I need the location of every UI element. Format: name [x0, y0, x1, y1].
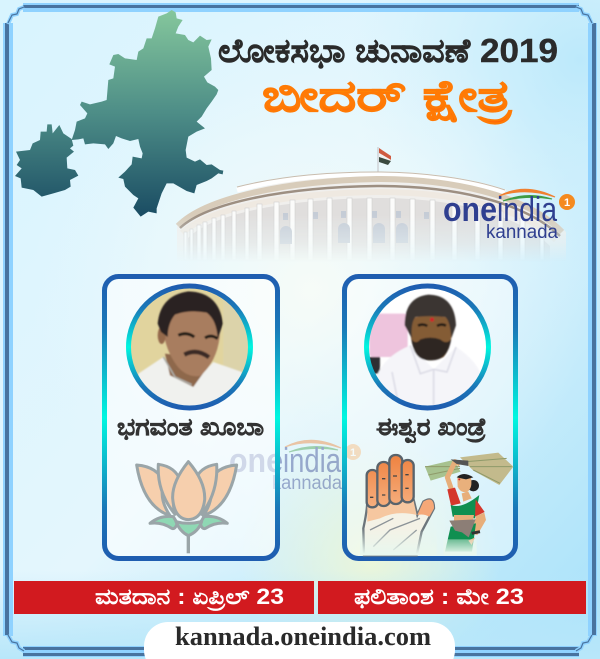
candidate name: ಈಶ್ವರ ಖಂಡ್ರೆ [376, 414, 486, 444]
portrait: Eshwar Khandre [366, 286, 488, 412]
building body [177, 172, 566, 265]
logo: oneindia kannada: india [497, 191, 557, 229]
watermark logo: kannada [272, 473, 342, 494]
title: ಲೋಕಸಭಾ ಚುನಾವಣೆ 2019 [218, 32, 558, 69]
map of constituency [15, 10, 223, 217]
logo: oneindia kannada: kannada [486, 222, 558, 243]
watermark logo: one [229, 442, 283, 480]
watermark logo: india [283, 442, 341, 480]
info bar: result date: ಫಲಿತಾಂಶ : ಮೇ 23 [354, 584, 524, 609]
info bar: polling date [14, 581, 314, 614]
icon: BJP lotus [137, 462, 237, 553]
portrait: Bhagwanth Khuba [128, 286, 252, 412]
logo: oneindia kannada: 1 [564, 197, 570, 209]
info bar: polling date: ಮತದಾನ : ಏಪ್ರಿಲ್ 23 [95, 584, 284, 611]
watermark logo [229, 440, 361, 494]
parliament building [177, 147, 566, 265]
info bar: result date [318, 581, 586, 614]
flag [378, 147, 391, 178]
logo: oneindia kannada [443, 189, 575, 243]
website pill: kannada.oneindia.com [175, 622, 431, 651]
candidate name: ಭಗವಂತ ಖೂಬಾ [117, 414, 264, 441]
logo: oneindia kannada: one [443, 191, 497, 229]
icon: Congress hand [360, 455, 437, 556]
website pill [144, 622, 455, 659]
subtitle: ಬೀದರ್ ಕ್ಷೇತ್ರ [262, 72, 512, 125]
watermark logo: 1 [350, 447, 356, 459]
panel: candidate 2 [344, 276, 516, 558]
panel: candidate 1 [104, 276, 278, 558]
icon: JDS farmer woman [425, 453, 513, 555]
